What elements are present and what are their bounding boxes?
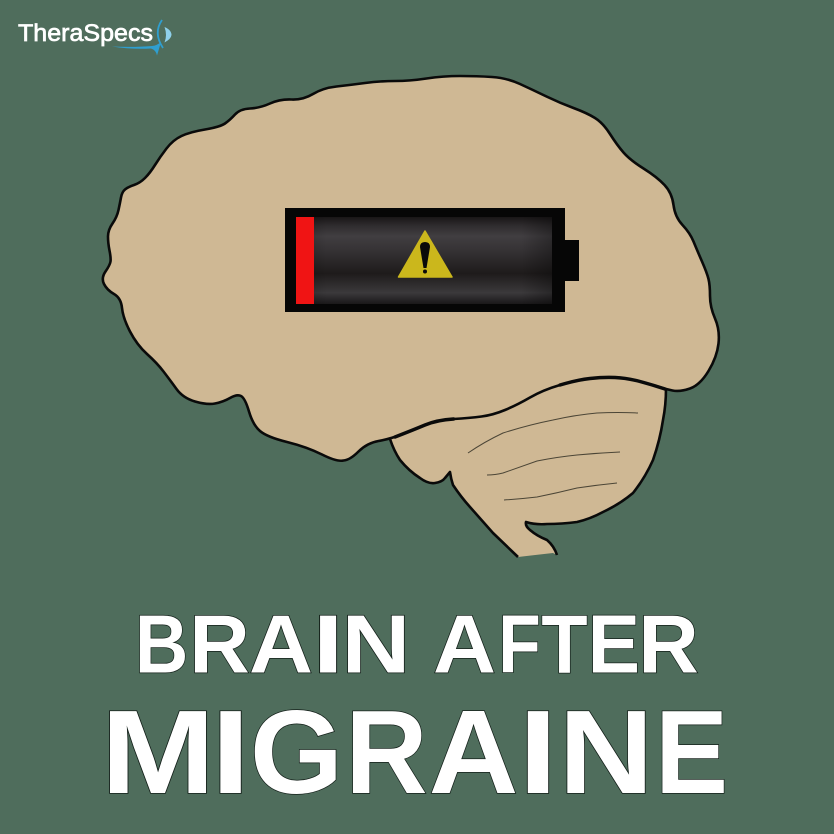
title line 1: R: [638, 598, 699, 690]
title line 2: I: [211, 686, 250, 819]
title line 1: T: [541, 598, 588, 690]
cerebellum outline: [390, 388, 666, 557]
logo: TheraSpecs: [18, 20, 172, 56]
title line 2: R: [345, 686, 428, 819]
logo swoosh: [112, 42, 161, 56]
title line 1: B: [135, 598, 188, 690]
battery cell edge shading: [296, 217, 552, 304]
title line 1: E: [588, 598, 640, 690]
title line 2: I: [518, 686, 558, 819]
cerebellum: [390, 365, 666, 557]
title line 2: G: [250, 686, 343, 819]
low charge red bar: [296, 217, 314, 304]
title line 1: A: [433, 598, 496, 690]
title line 2: A: [429, 686, 518, 819]
title line 1: F: [498, 598, 541, 690]
exclamation mark: [420, 242, 430, 268]
thick boundary between cerebrum and cerebellum: [395, 377, 665, 437]
battery terminal: [560, 240, 579, 281]
title line 2: E: [655, 686, 728, 819]
cerebellum fold lines: [468, 412, 638, 500]
cerebrum: [103, 76, 719, 461]
title line 2: N: [558, 686, 654, 819]
warning triangle: [398, 231, 452, 277]
battery casing: [285, 208, 565, 312]
title line 2: M: [101, 686, 215, 819]
brain illustration: [103, 76, 719, 557]
title line 1: I: [313, 598, 344, 690]
low battery icon: [285, 208, 579, 312]
logo wordmark: TheraSpecs: [18, 20, 153, 47]
title line 1: A: [249, 598, 313, 690]
title line 1: N: [342, 598, 410, 690]
battery cell: [296, 217, 552, 304]
title line 1: R: [189, 598, 250, 690]
logo eye: [158, 20, 172, 48]
cerebellum fill: [390, 365, 666, 557]
title: [101, 598, 728, 819]
